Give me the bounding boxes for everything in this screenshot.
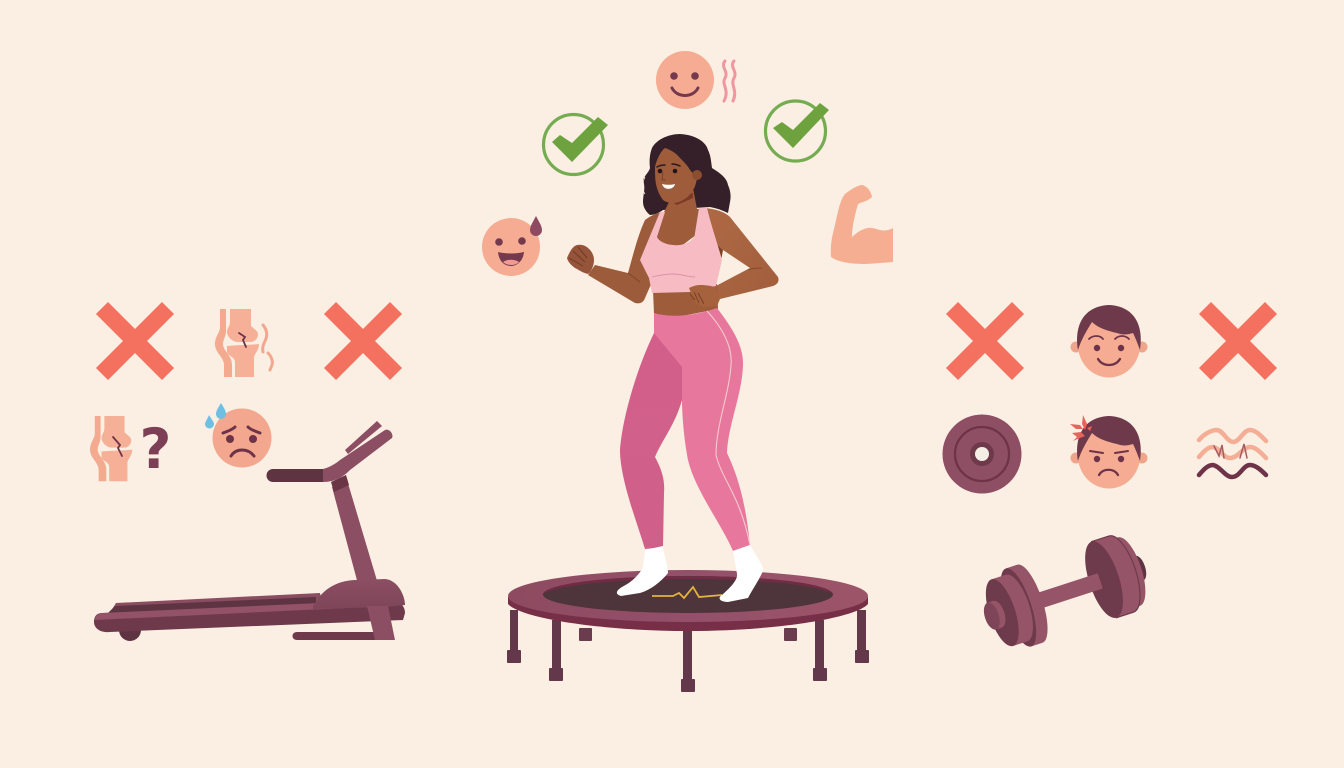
icon: happy face with sweat drop: [482, 216, 542, 276]
right arm: [705, 208, 779, 299]
icon: smiling face with heat waves: [656, 51, 735, 109]
icon: happy man face: [1070, 305, 1148, 378]
legging stripe: [707, 311, 750, 545]
icon: knee with question mark: ?: [140, 417, 171, 481]
icon: sad sweating face: [205, 403, 272, 468]
leggings front leg: [654, 308, 750, 551]
trampoline: [507, 570, 869, 692]
icon: weight plate: [942, 414, 1022, 494]
icon: knee with cracked joint and pain waves: [215, 309, 272, 377]
face: [655, 148, 702, 203]
icon: red cross left: [952, 308, 1018, 374]
left arm and fist: [567, 212, 662, 303]
socks: [617, 545, 763, 602]
hair: [643, 134, 731, 215]
left panel: high-impact cardio downsides: [90, 308, 405, 641]
icon: green check left: [544, 114, 608, 174]
midriff: [653, 284, 718, 317]
trampoline mat: [543, 576, 833, 613]
right hand: [689, 285, 720, 307]
trampoline back legs: [579, 628, 797, 641]
treadmill: [94, 421, 405, 641]
icon: red cross left: [102, 308, 168, 374]
centre panel: woman on rebounder with benefit icons: [482, 51, 893, 692]
mat impact zigzag: [652, 587, 722, 598]
icon: red cross right: [330, 308, 396, 374]
icon: knee with question mark: [90, 416, 171, 481]
icon: unhappy man with head pain: [1070, 415, 1148, 488]
icon: flexed muscle arm: [831, 185, 893, 264]
trampoline rim: [508, 597, 868, 631]
right panel: weight lifting downsides: [942, 305, 1271, 657]
crop top: [640, 208, 722, 293]
leggings back leg: [620, 322, 690, 549]
trampoline front legs: [507, 610, 869, 692]
icon: red cross right: [1205, 308, 1271, 374]
woman: [567, 134, 779, 602]
icon: muscle fibre waves: [1199, 430, 1266, 477]
chest and neck skin: [655, 188, 700, 247]
icon: green check right: [766, 101, 829, 161]
dumbbell: [972, 527, 1158, 657]
